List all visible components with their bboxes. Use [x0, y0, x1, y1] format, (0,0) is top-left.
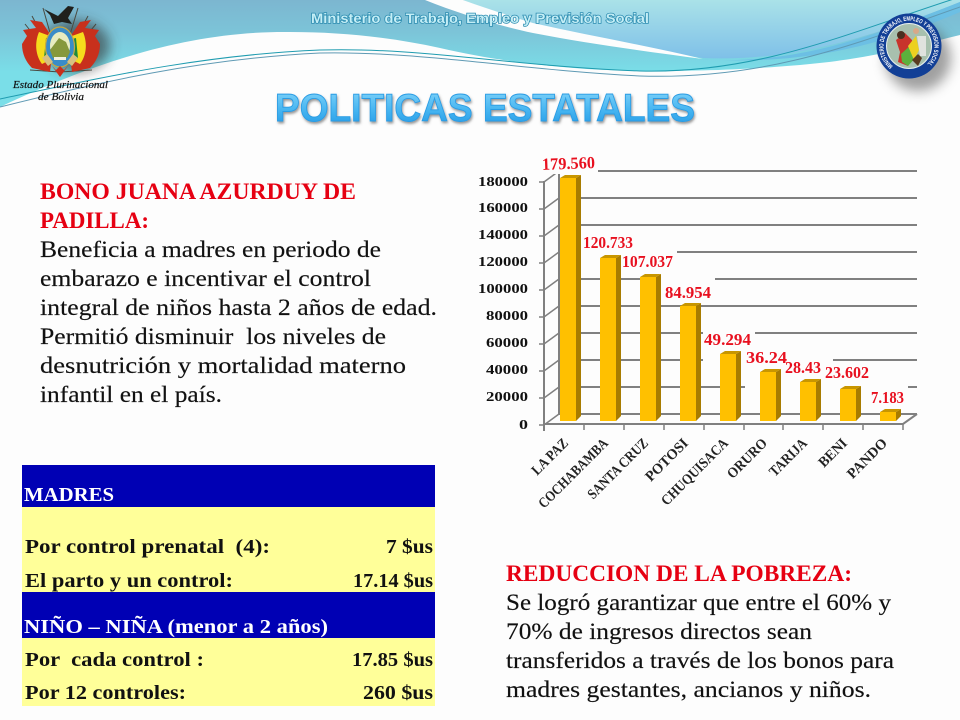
header banner	[0, 0, 960, 107]
x axis labels: PANDO	[844, 436, 891, 482]
table: bonus amounts	[22, 465, 435, 706]
value labels: 28.43	[785, 358, 821, 377]
title: POLITICAS ESTATALES	[275, 87, 695, 130]
value labels: 7.183	[871, 388, 904, 407]
table rows: nino nina: Por 12 controles:	[25, 682, 186, 704]
header ministry title: Ministerio de Trabajo, Empleo y Previsión Social	[311, 10, 649, 26]
x axis labels: LA PAZ	[529, 436, 572, 479]
heading: Bono Juana Azurduy de Padilla: PADILLA:	[40, 208, 149, 233]
coat of arms caption: Estado Plurinacional	[12, 80, 108, 91]
x axis labels: CHUQUISACA	[658, 435, 732, 509]
coat of arms caption: de Bolivia	[38, 92, 84, 103]
value labels: 84.954	[665, 283, 711, 302]
icon: Bolivia coat of arms	[22, 6, 110, 77]
text block: Bono Juana Azurduy: Permitió disminuir los niveles de	[40, 324, 386, 349]
table header: madres: MADRES	[24, 484, 114, 506]
icon: ministry seal	[876, 14, 958, 98]
text block: reduccion de la pobreza: Se logró garantizar que entre el 60% y	[506, 590, 892, 615]
text block: Bono Juana Azurduy: Beneficia a madres en periodo de	[40, 237, 381, 262]
y axis labels: 0	[519, 418, 528, 433]
x axis labels: SANTA CRUZ	[585, 436, 652, 503]
y axis labels: 120000	[478, 255, 528, 270]
text block: Bono Juana Azurduy: integral de niños hasta 2 años de edad.	[40, 295, 437, 320]
table rows: madres: 17.14 $us	[353, 570, 433, 592]
table rows: madres	[25, 536, 433, 592]
text block: Bono Juana Azurduy: desnutrición y mortalidad materno	[40, 353, 406, 378]
bar chart: beneficiaries by department	[478, 150, 917, 512]
value labels: 107.037	[622, 252, 673, 271]
y axis labels: 60000	[486, 336, 528, 351]
text block: Bono Juana Azurduy: embarazo e incentivar el control	[40, 266, 371, 291]
x axis labels: COCHABAMBA	[535, 435, 612, 512]
heading: Bono Juana Azurduy de Padilla: BONO JUANA AZURDUY DE	[40, 179, 356, 204]
coat of arms caption	[12, 80, 108, 103]
y axis labels: 140000	[478, 228, 528, 243]
table rows: nino nina: 260 $us	[363, 682, 433, 704]
table rows: madres: 7 $us	[386, 536, 433, 558]
table rows: nino nina	[25, 649, 433, 704]
text block: reduccion de la pobreza: REDUCCION DE LA POBREZA:	[506, 561, 852, 586]
y axis labels: 80000	[486, 309, 528, 324]
y axis labels: 100000	[478, 282, 528, 297]
y axis labels: 40000	[486, 363, 528, 378]
x axis labels: BENI	[815, 435, 851, 471]
table rows: nino nina: Por cada control :	[25, 649, 204, 671]
y axis labels	[478, 175, 528, 433]
value labels: 120.733	[583, 233, 633, 252]
value labels: 179.560	[542, 153, 595, 174]
x axis labels: POTOSI	[642, 435, 692, 485]
text block: reduccion de la pobreza: 70% de ingresos directos sean	[506, 619, 813, 644]
x axis labels: TARIJA	[766, 435, 811, 480]
text block: Bono Juana Azurduy: infantil en el país.	[40, 382, 222, 407]
value labels	[542, 153, 904, 407]
x axis labels: ORURO	[724, 436, 771, 482]
value labels: 49.294	[704, 330, 752, 349]
text block: reduccion de la pobreza: transferidos a través de los bonos para	[506, 648, 894, 673]
y axis labels: 160000	[478, 201, 528, 216]
x axis labels	[529, 435, 891, 512]
value labels: 36.24	[746, 348, 788, 367]
y axis labels: 20000	[486, 390, 528, 405]
table rows: madres: Por control prenatal (4):	[25, 536, 270, 558]
heading: Bono Juana Azurduy de Padilla	[40, 179, 356, 233]
text block: Bono Juana Azurduy	[40, 179, 437, 407]
y axis labels: 180000	[478, 175, 528, 190]
table rows: madres: El parto y un control:	[25, 570, 233, 592]
icon: ministry seal: MINISTERIO DE TRABAJO, EMPLEO Y PREVISION SOCIAL	[879, 16, 939, 69]
table header: nino nina: NIÑO – NIÑA (menor a 2 años)	[24, 615, 328, 638]
value labels: 23.602	[825, 363, 869, 382]
bars	[560, 175, 901, 421]
text block: reduccion de la pobreza	[506, 561, 894, 702]
table rows: nino nina: 17.85 $us	[352, 649, 433, 671]
text block: reduccion de la pobreza: madres gestantes, ancianos y niños.	[506, 677, 871, 702]
